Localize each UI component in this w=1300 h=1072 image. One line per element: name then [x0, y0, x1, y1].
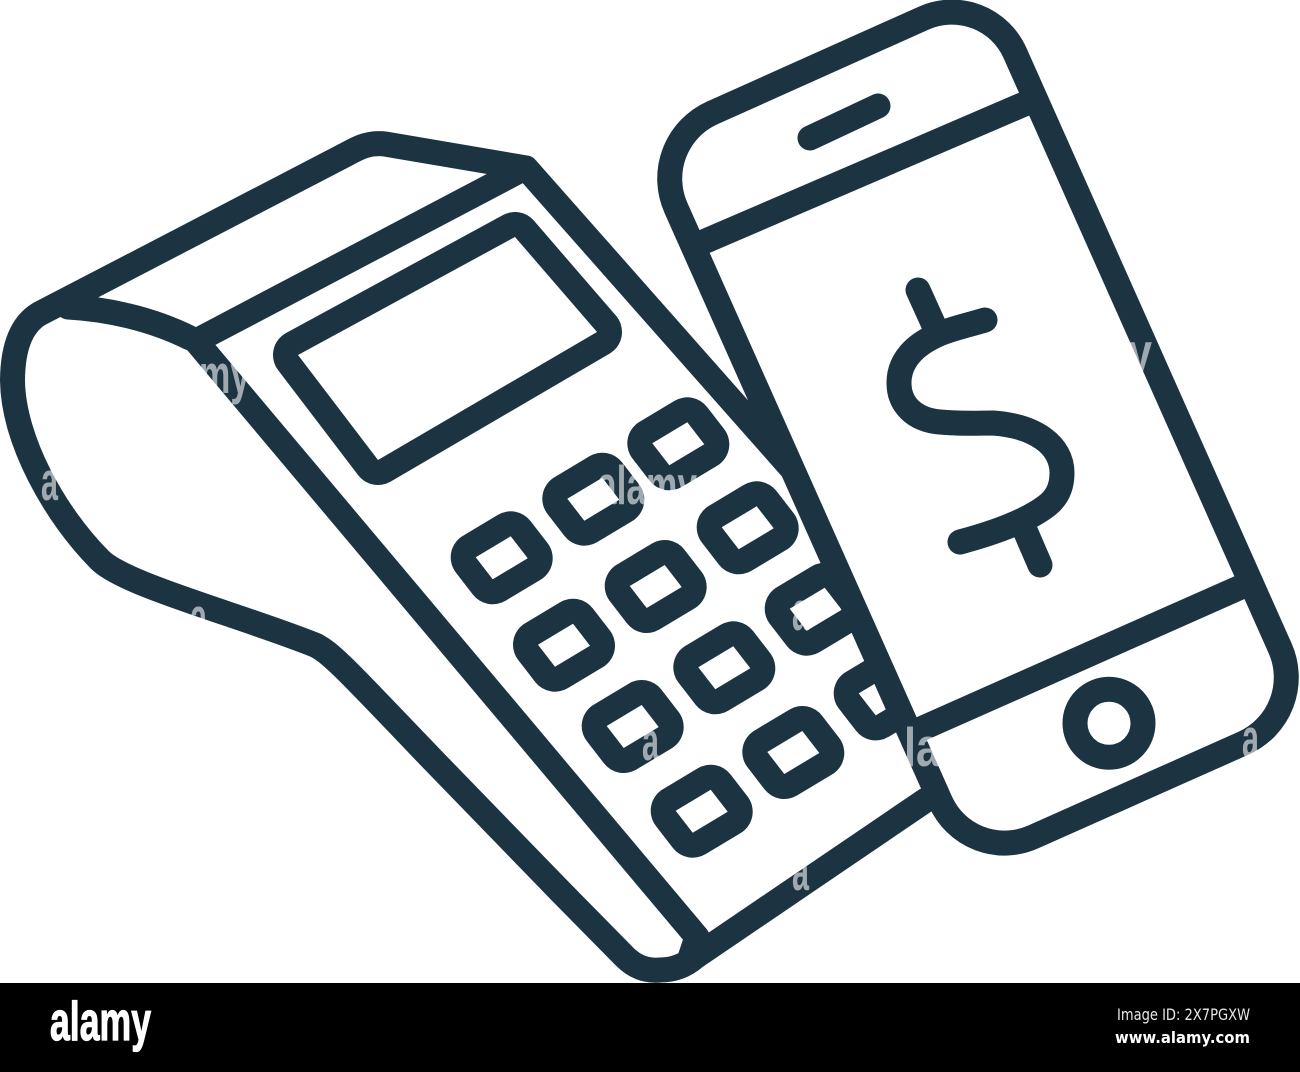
keypad — [476, 422, 911, 833]
icon: smartphone with dollar sign — [670, 12, 1286, 843]
phone speaker — [810, 106, 878, 138]
footer bar — [0, 983, 1300, 1072]
watermark: alamy — [150, 343, 250, 405]
phone body — [670, 12, 1286, 843]
watermark: alamy — [597, 454, 697, 516]
watermark: a — [792, 580, 809, 642]
terminal nose arc — [68, 307, 190, 338]
dollar sign — [899, 290, 1062, 565]
watermark: y — [1128, 321, 1152, 383]
watermark — [41, 321, 1259, 902]
image id: Image ID: 2X7PGXW — [1117, 1005, 1250, 1024]
terminal top face and front edge — [195, 169, 697, 958]
watermark: ala — [880, 716, 940, 778]
watermark: a — [190, 586, 207, 648]
terminal body outline — [12, 144, 926, 970]
watermark: a — [41, 450, 58, 512]
watermark: a — [1242, 707, 1259, 769]
phone top separator — [694, 99, 1036, 246]
website: www.alamy.com — [1115, 1028, 1250, 1047]
phone bottom separator — [905, 583, 1250, 736]
icon: POS payment terminal — [12, 144, 926, 970]
phone home button — [1075, 689, 1143, 757]
alamy logo: alamy — [50, 990, 151, 1052]
watermark: a — [792, 840, 809, 902]
watermark: a — [642, 710, 659, 772]
terminal screen — [298, 237, 597, 460]
